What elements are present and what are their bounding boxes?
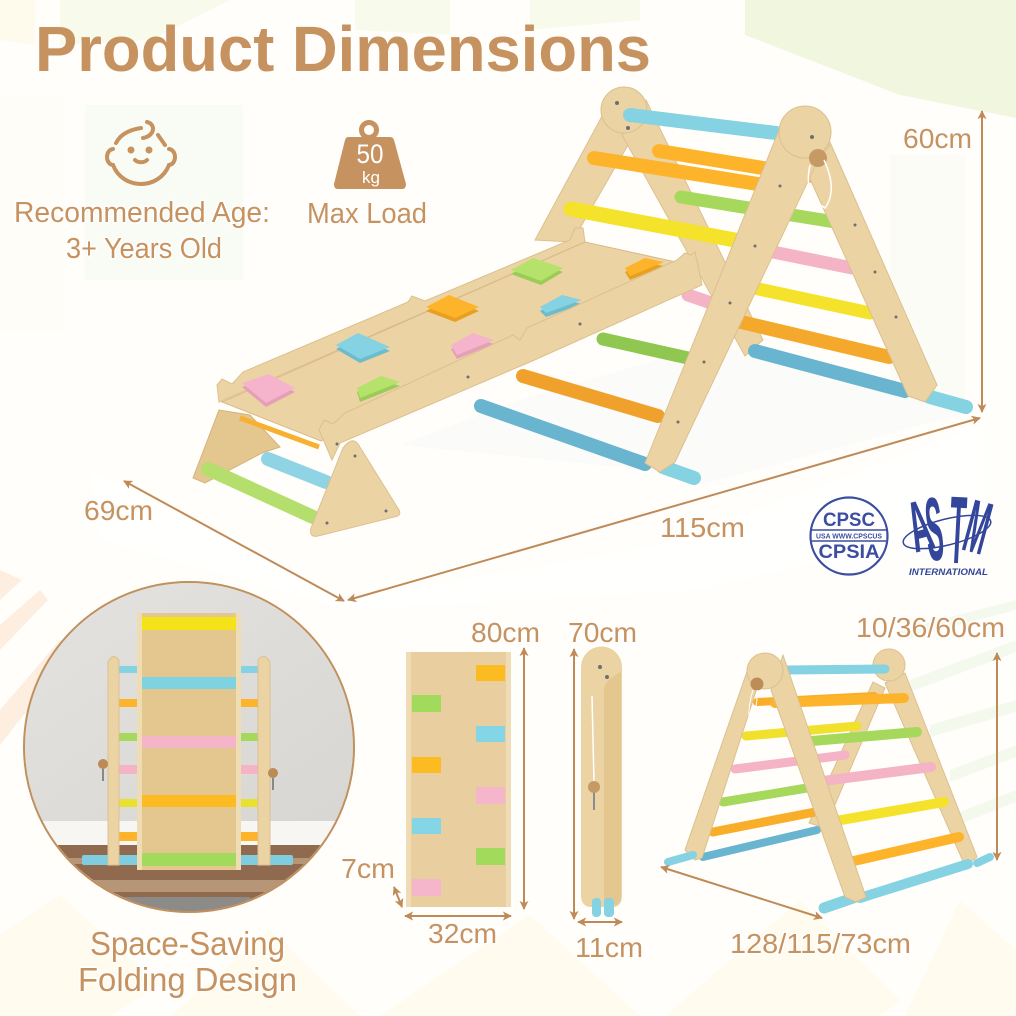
arrow: 10/36/60cm height — [996, 653, 998, 860]
text: space-saving folding design: Folding Design — [78, 961, 297, 998]
arrow: 128/115/73cm length — [661, 867, 822, 918]
text: space-saving folding design: Space-Saving — [90, 925, 285, 962]
label: 60cm: 60cm — [903, 123, 972, 154]
back frame — [535, 87, 763, 356]
text: recommended age: 3+ Years Old — [66, 233, 222, 265]
rungs — [481, 115, 966, 478]
icon: 50 kg weight: kg — [362, 168, 380, 187]
folded board with rungs — [137, 613, 241, 870]
logo: ASTM International: INTERNATIONAL — [909, 567, 988, 577]
front rungs — [668, 698, 990, 908]
text: max load: Max Load — [307, 198, 427, 230]
panel: ramp board top view — [406, 652, 511, 907]
label: 80cm: 80cm — [471, 617, 540, 648]
logo: ASTM International: M — [956, 484, 999, 570]
icon: baby face — [107, 122, 175, 184]
text: recommended age: Recommended Age: — [14, 197, 270, 229]
panel: triangle climber — [668, 649, 990, 908]
label: 70cm: 70cm — [568, 617, 637, 648]
label: 7cm: 7cm — [341, 853, 395, 884]
arrow: 80cm — [523, 648, 525, 909]
panel: folded view circle — [20, 580, 360, 915]
logo: CPSC CPSIA: USA WWW.CPSCUS — [816, 532, 882, 540]
icon: 50 kg weight — [334, 122, 406, 189]
logo: ASTM International: S — [922, 479, 947, 581]
ramp — [217, 228, 702, 460]
rear and top rungs — [703, 669, 885, 857]
panel: folded side view — [581, 646, 622, 917]
arrow: 32cm — [405, 915, 511, 917]
arrow: 11cm — [578, 921, 622, 923]
climbing holds — [242, 258, 664, 407]
label: 69cm: 69cm — [84, 495, 153, 526]
label: 128/115/73cm: 128/115/73cm — [730, 928, 911, 959]
folded frames and stub rungs — [82, 656, 293, 865]
logo: ASTM International: A — [899, 484, 941, 568]
label: 11cm: 11cm — [575, 932, 643, 963]
arrow: 69cm width — [124, 481, 344, 601]
climbing holds — [412, 665, 505, 896]
title: Product Dimensions — [35, 13, 651, 85]
arrow: 115cm length — [348, 418, 980, 600]
text: space-saving folding design — [78, 925, 297, 998]
front-left leg — [685, 660, 757, 860]
front frame — [645, 106, 937, 472]
icon: 50 kg weight: 50 — [356, 139, 384, 169]
logo: CPSC CPSIA: CPSC — [823, 510, 875, 531]
floor shadow — [400, 350, 970, 485]
label: 32cm: 32cm — [428, 918, 497, 949]
logo: CPSC CPSIA — [810, 498, 888, 574]
main product: climbing triangle with ramp — [193, 87, 970, 536]
arrow: 70cm — [573, 649, 575, 919]
back low support — [193, 410, 326, 517]
arrow: 7cm — [394, 887, 402, 907]
logo: ASTM International — [899, 476, 999, 584]
front low support — [311, 441, 400, 536]
label: 115cm: 115cm — [660, 512, 745, 543]
front-right leg and head — [747, 653, 866, 902]
label: 10/36/60cm: 10/36/60cm — [856, 612, 1005, 643]
text: recommended age — [14, 197, 270, 265]
logo: CPSC CPSIA: CPSIA — [818, 542, 880, 563]
logo: ASTM International: T — [947, 476, 969, 584]
arrow: 60cm height — [981, 111, 983, 412]
rear frame — [809, 649, 977, 866]
